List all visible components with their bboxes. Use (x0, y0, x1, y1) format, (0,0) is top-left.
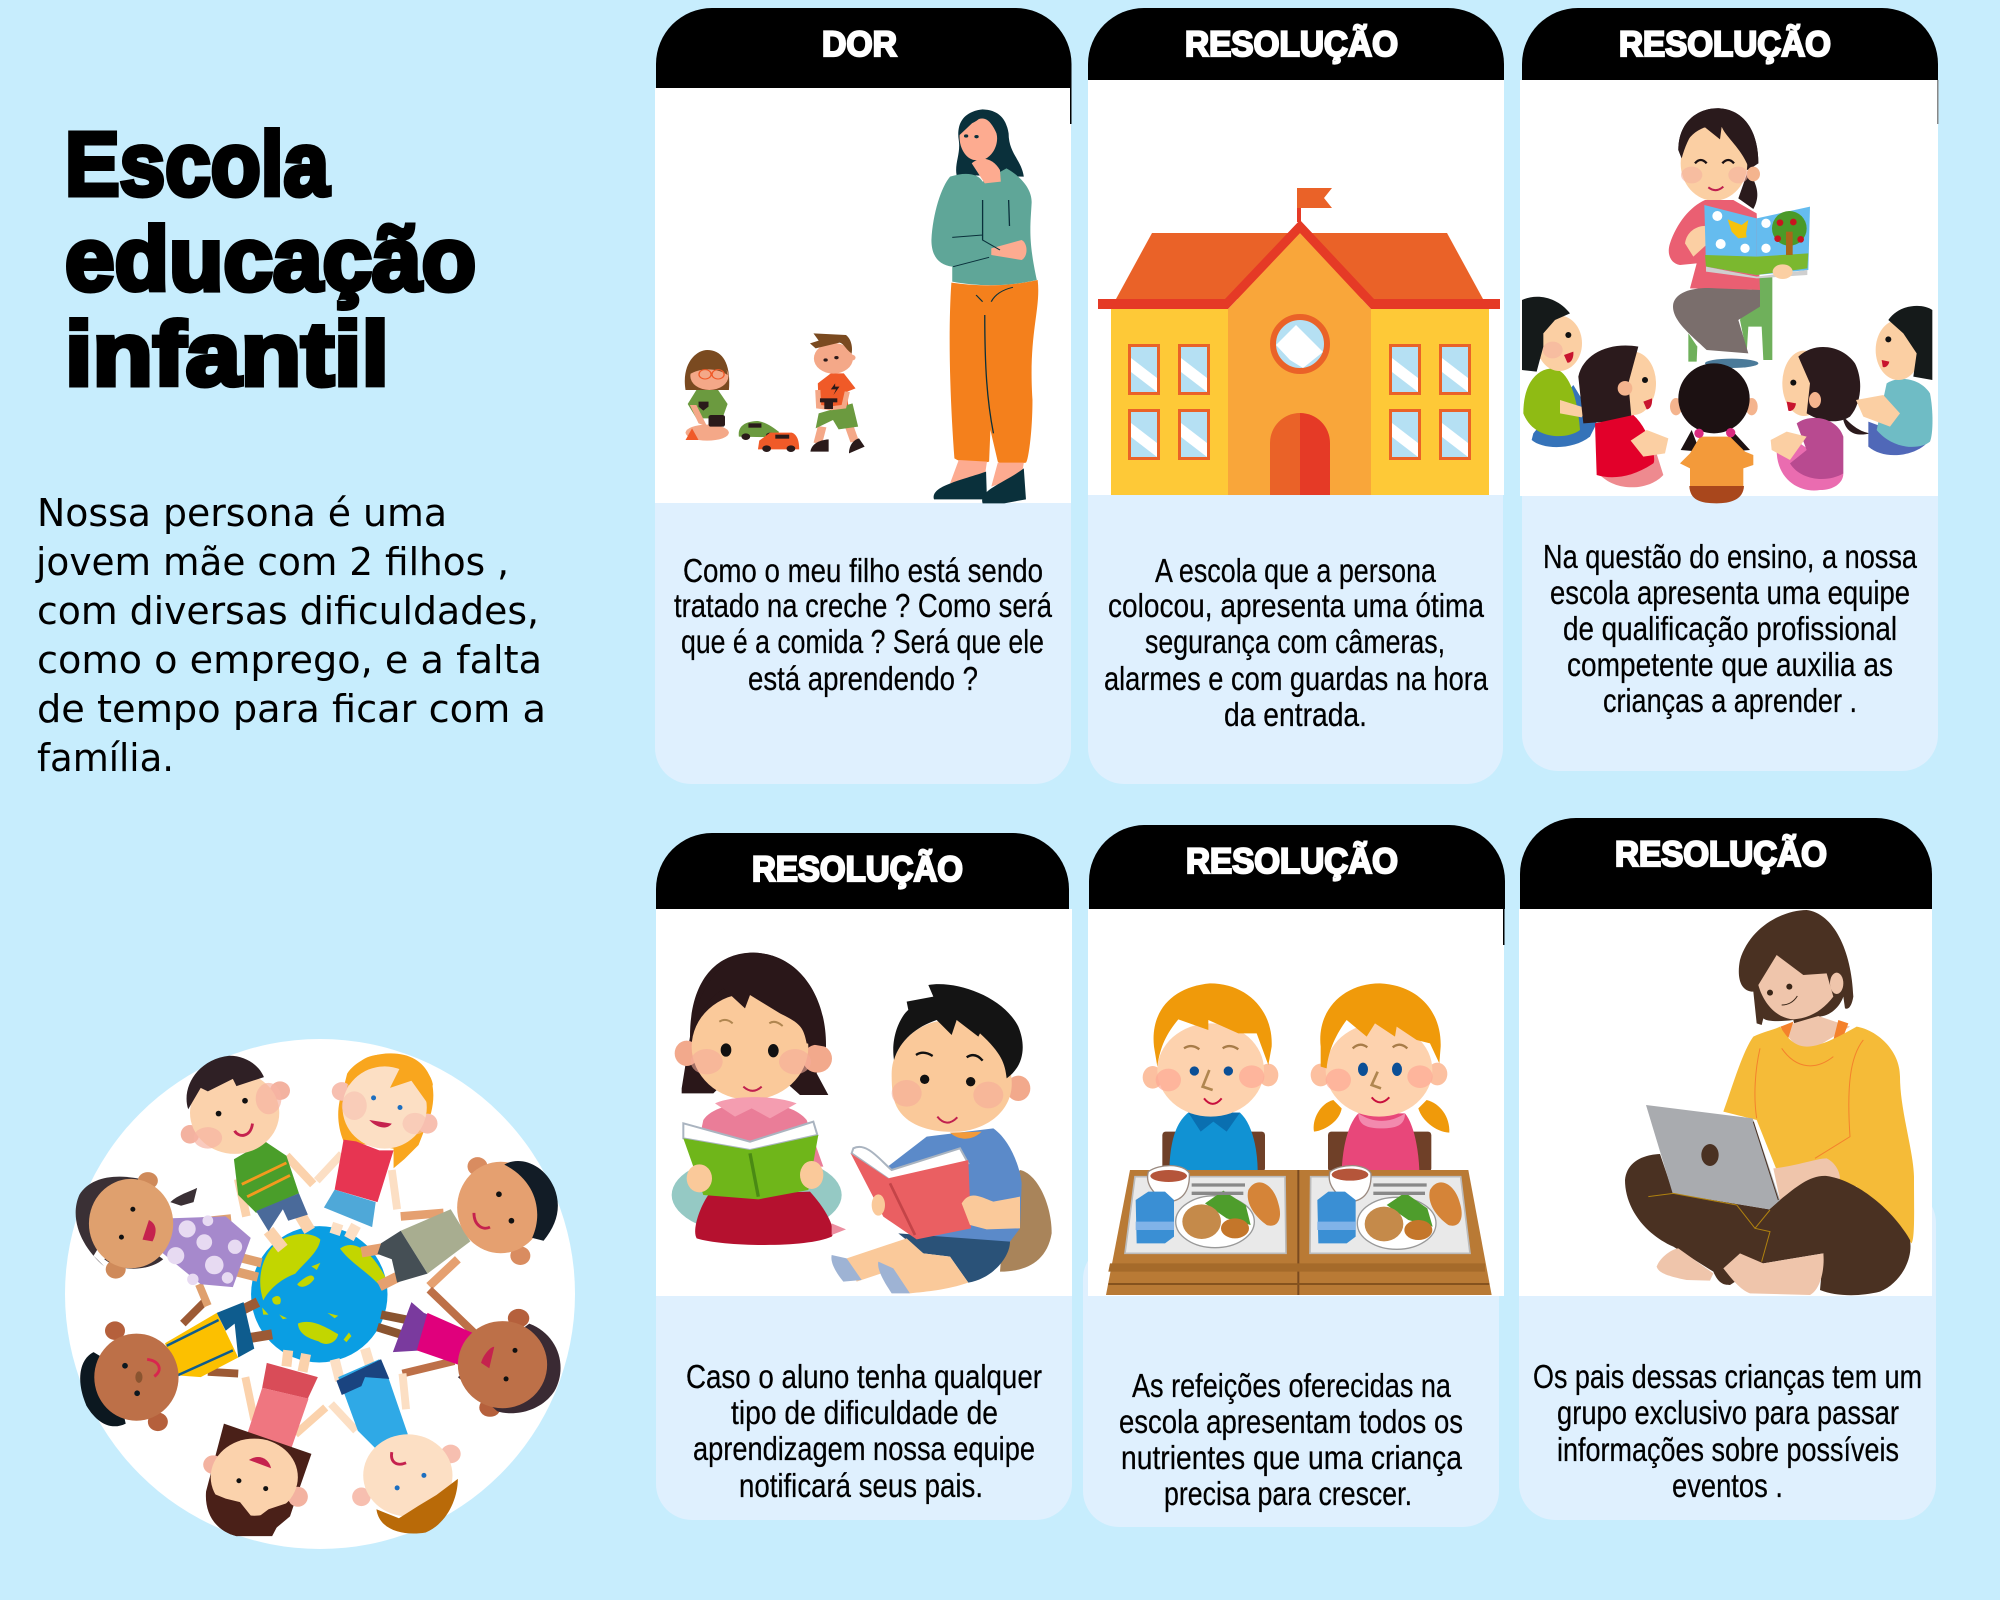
text block: alarmes e com guardas na hora (1104, 660, 1489, 697)
header: RESOLUÇÃO (1522, 8, 1938, 80)
illustration: teacher reading to children (1522, 108, 1932, 503)
panel: DOR (655, 8, 1072, 784)
globe (251, 1226, 387, 1362)
text block: da entrada. (1224, 696, 1367, 733)
persona description text (35, 491, 546, 780)
toy cars (739, 421, 799, 452)
illustration: worried mother and playing children (685, 109, 1038, 503)
teacher (1669, 108, 1810, 368)
child: green shirt (1522, 297, 1597, 447)
panel: RESOLUÇÃO school (1088, 8, 1504, 784)
text block (1119, 1367, 1463, 1512)
girl (1311, 983, 1449, 1172)
child: girl with magenta top (377, 1290, 561, 1417)
text block: que é a comida ? Será que ele (681, 623, 1044, 660)
text block: notificará seus pais. (739, 1467, 983, 1504)
child: red shirt (1578, 346, 1668, 487)
child: boy in yellow shirt (80, 1302, 272, 1431)
text block: grupo exclusivo para passar (1557, 1394, 1899, 1431)
text block: Como o meu filho está sendo (683, 552, 1043, 589)
illustration: mother with laptop (1625, 910, 1914, 1295)
text block: nutrientes que uma criança (1121, 1439, 1463, 1476)
table with meal trays (1106, 1166, 1492, 1295)
text block: eventos . (1672, 1467, 1783, 1504)
girl with green book (672, 953, 846, 1245)
text block: colocou, apresenta uma ótima (1108, 587, 1485, 624)
text block: informações sobre possíveis (1557, 1431, 1899, 1468)
child: boy in green shirt (181, 1056, 313, 1249)
title: Escola (65, 115, 330, 215)
boy (1143, 983, 1278, 1172)
persona description text: família. (37, 736, 174, 780)
header: RESOLUÇÃO: RESOLUÇÃO (1619, 25, 1831, 64)
persona description text: de tempo para ficar com a (37, 687, 546, 731)
text block (1533, 1358, 1922, 1504)
header: DOR (656, 8, 1072, 88)
child: teal shirt (1856, 306, 1932, 455)
header: RESOLUÇÃO: RESOLUÇÃO (1185, 25, 1398, 64)
illustration: children eating school meals (1106, 983, 1492, 1295)
illustration: children reading books (672, 953, 1052, 1293)
text block (1543, 538, 1918, 719)
title: educação (65, 210, 476, 310)
panel: RESOLUÇÃO reading (656, 833, 1072, 1520)
text block (686, 1358, 1042, 1504)
text block: Na questão do ensino, a nossa (1543, 538, 1918, 575)
text block: crianças a aprender . (1603, 682, 1857, 719)
girl playing (685, 350, 729, 441)
header: RESOLUÇÃO (1089, 825, 1505, 909)
boy playing (810, 333, 865, 453)
text block: precisa para crescer. (1164, 1475, 1412, 1512)
panel: RESOLUÇÃO parents group (1519, 818, 1936, 1520)
panel: RESOLUÇÃO teacher (1520, 8, 1938, 771)
text block: escola apresentam todos os (1119, 1403, 1463, 1440)
header: RESOLUÇÃO: RESOLUÇÃO (752, 850, 963, 889)
title (65, 115, 476, 405)
text block: As refeições oferecidas na (1132, 1367, 1452, 1404)
child: orange shirt, seen from behind (1670, 363, 1758, 503)
text block (1104, 552, 1489, 733)
text block: competente que auxilia as (1567, 646, 1893, 683)
header: RESOLUÇÃO (1520, 818, 1932, 909)
mother (931, 109, 1038, 503)
child: bottom-right girl in blue (331, 1349, 461, 1534)
persona description text: Nossa persona é uma (37, 491, 447, 535)
header: RESOLUÇÃO: RESOLUÇÃO (1615, 835, 1827, 874)
child: girl in purple flowered dress (76, 1172, 261, 1306)
child: blond girl in red (317, 1053, 437, 1239)
text block: tratado na creche ? Como será (674, 587, 1053, 624)
text block (674, 552, 1053, 697)
text block: escola apresenta uma equipe (1550, 574, 1910, 611)
child: purple shirt (1771, 347, 1870, 490)
header: RESOLUÇÃO (1088, 8, 1504, 80)
persona description text: jovem mãe com 2 filhos , (35, 540, 509, 584)
header: DOR: DOR (822, 25, 897, 64)
text block: Os pais dessas crianças tem um (1533, 1358, 1922, 1395)
header: RESOLUÇÃO: RESOLUÇÃO (1186, 842, 1398, 881)
header: RESOLUÇÃO (656, 833, 1069, 909)
title: infantil (65, 305, 389, 405)
child: boy in plaid shirt (361, 1157, 558, 1286)
text block: de qualificação profissional (1563, 610, 1897, 647)
illustration: children holding hands around the globe (65, 1039, 575, 1549)
boy with red book (831, 984, 1052, 1293)
illustration: school building (1098, 188, 1500, 495)
persona description text: com diversas dificuldades, (37, 589, 539, 633)
panel: RESOLUÇÃO meals (1083, 825, 1505, 1527)
child: bottom girl in pink (203, 1350, 326, 1536)
text block: segurança com câmeras, (1145, 623, 1445, 660)
text block: A escola que a persona (1155, 552, 1437, 589)
text block: tipo de dificuldade de (731, 1394, 998, 1431)
text block: aprendizagem nossa equipe (693, 1430, 1035, 1467)
text block: está aprendendo ? (748, 660, 978, 697)
persona description text: como o emprego, e a falta (37, 638, 542, 682)
text block: Caso o aluno tenha qualquer (686, 1358, 1042, 1395)
